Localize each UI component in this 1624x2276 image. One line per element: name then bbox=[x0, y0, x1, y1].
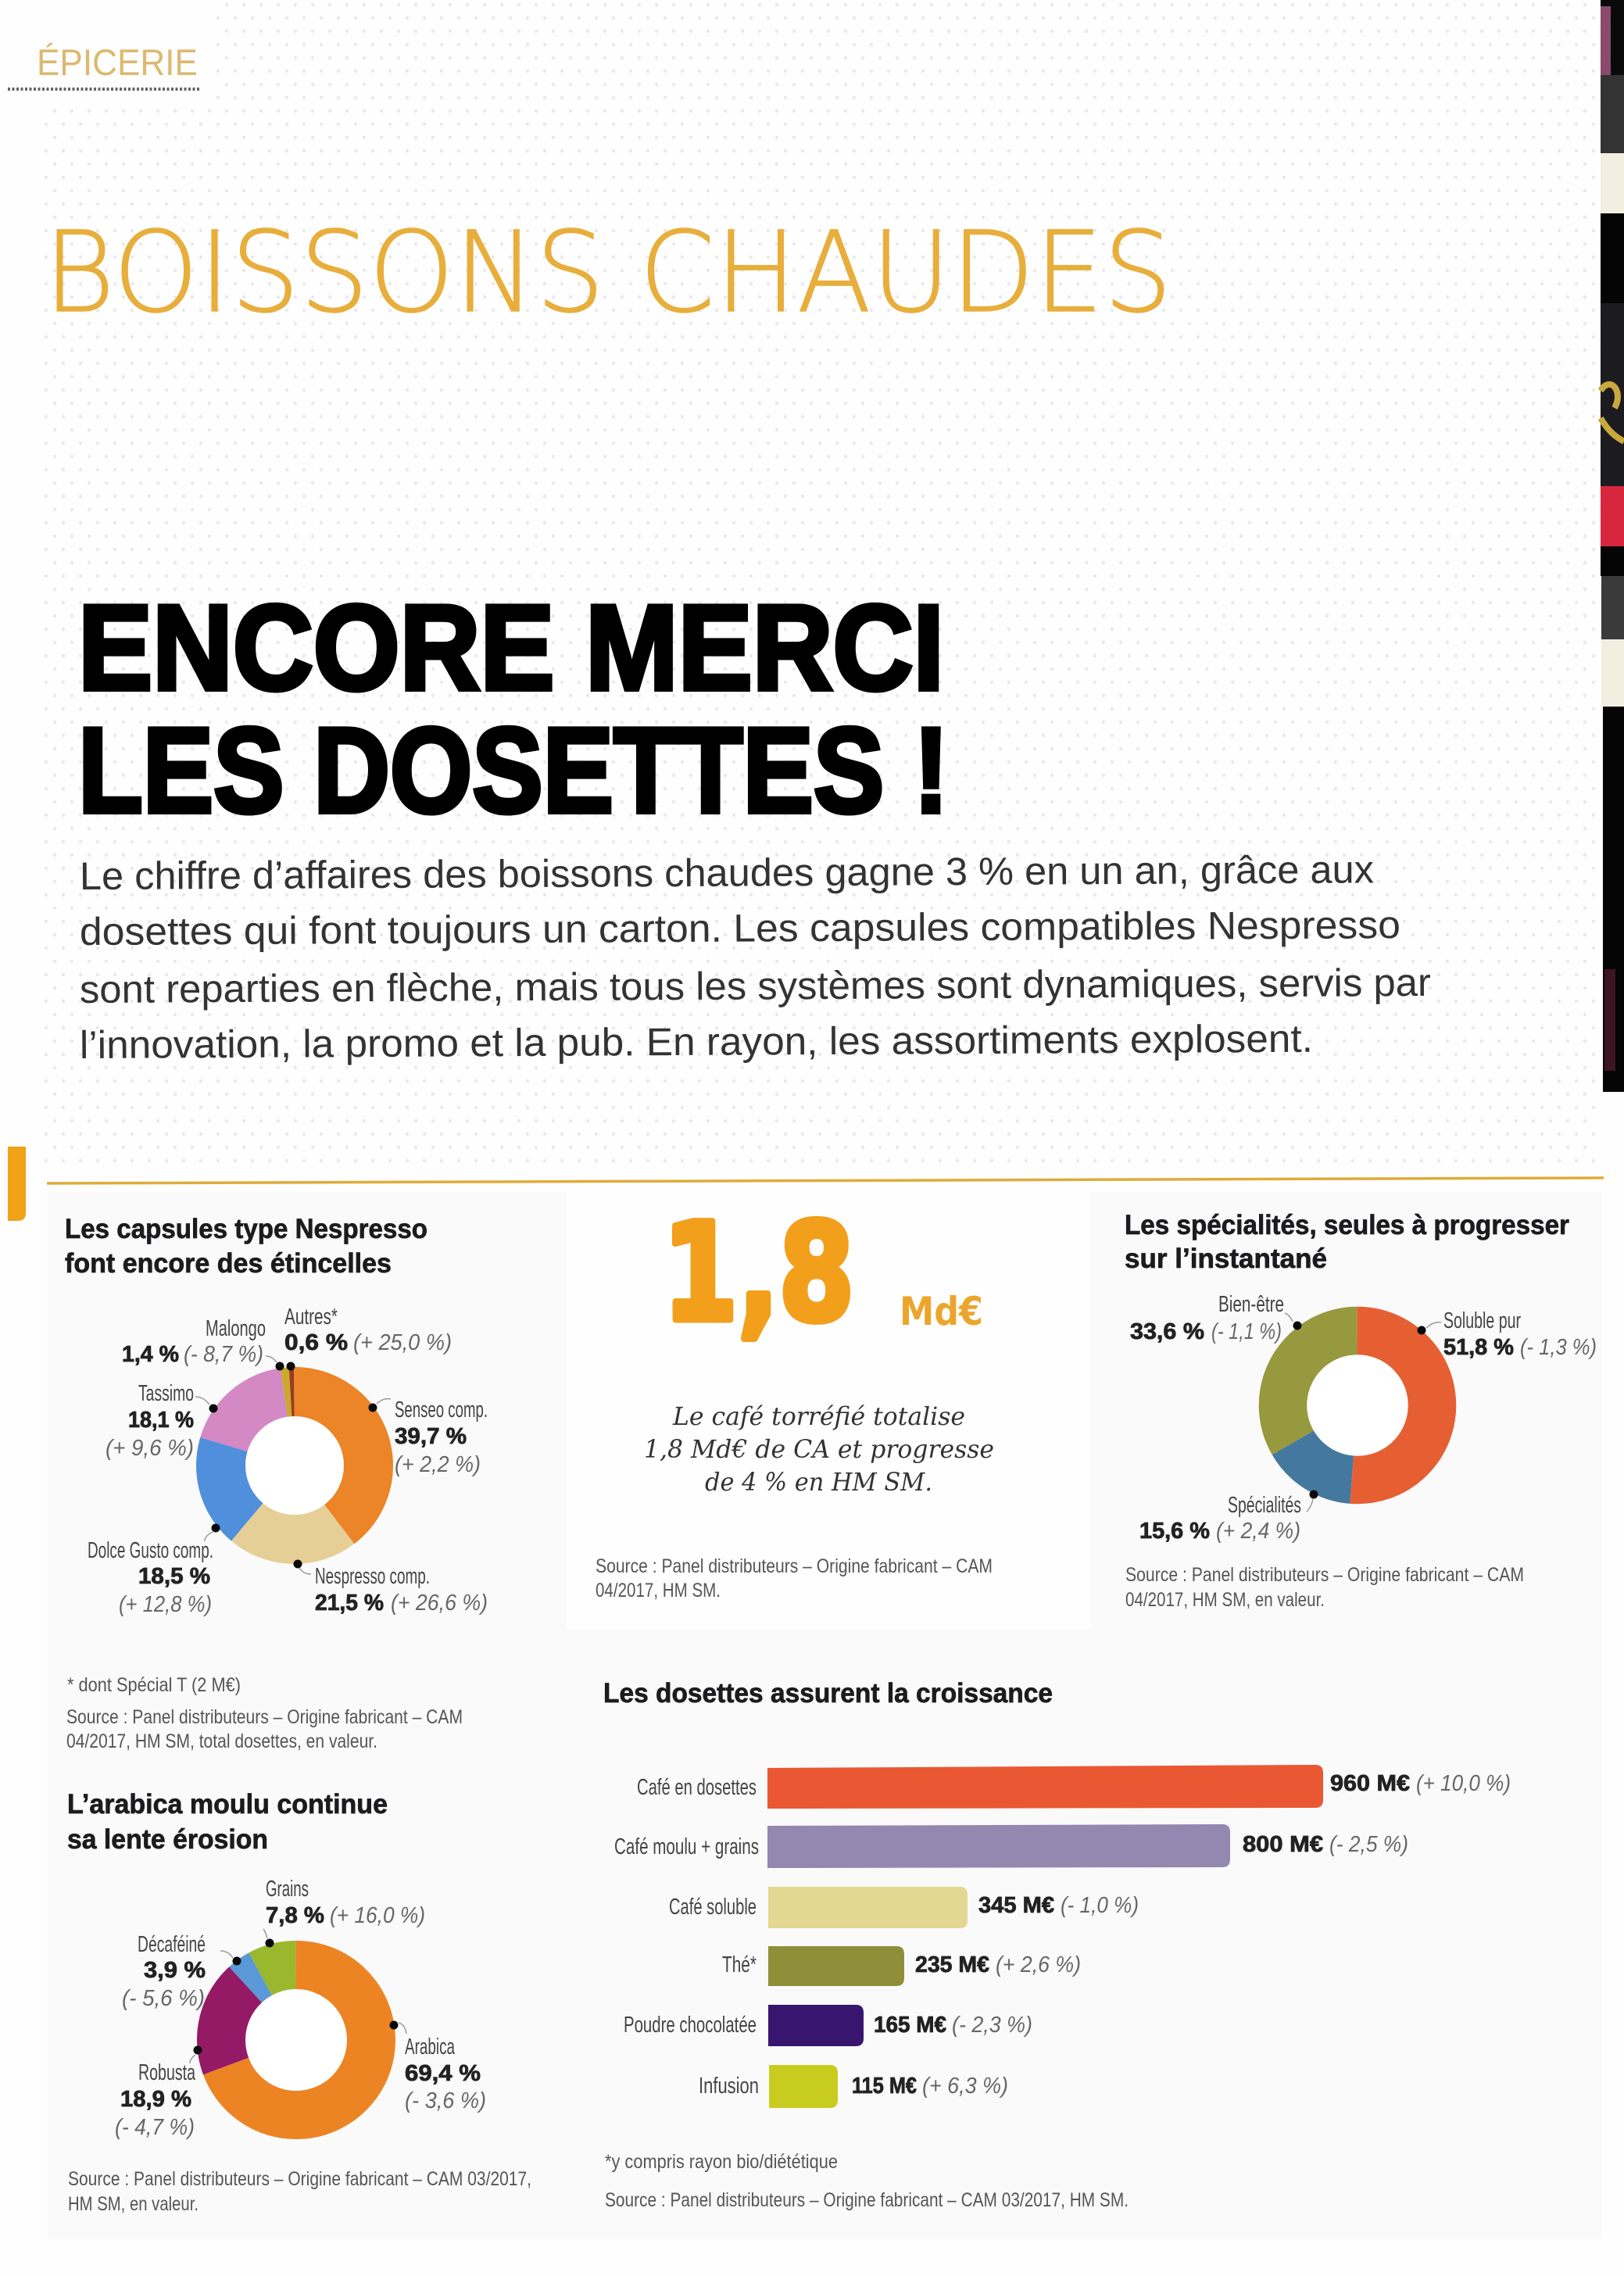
label: Grains: 7,8 % bbox=[266, 1903, 324, 1928]
source: café torréfié bbox=[596, 1555, 993, 1601]
heading: arabica: sa lente érosion bbox=[67, 1824, 268, 1855]
label: Robusta: Robusta bbox=[138, 2060, 196, 2085]
title: Encore merci les dosettes: ENCORE MERCI bbox=[78, 580, 944, 715]
heading: capsules bbox=[65, 1214, 427, 1279]
label: Grains: Grains bbox=[266, 1877, 309, 1902]
label: Décaféiné: 3,9 % bbox=[144, 1958, 206, 1983]
section label: Épicerie: ÉPICERIE bbox=[37, 41, 198, 83]
text block: introduction: l’innovation, la promo et la pub. En rayon, les assortiments explosent. bbox=[80, 1017, 1313, 1067]
label: Robusta: (- 4,7 %) bbox=[115, 2115, 195, 2140]
label: Senseo comp.: 39,7 % bbox=[395, 1424, 467, 1449]
bar: thé: 235 M€ bbox=[915, 1952, 989, 1977]
bar: poudre chocolatée bbox=[624, 2005, 1032, 2046]
label: Arabica bbox=[405, 2034, 486, 2113]
label: Décaféiné bbox=[122, 1932, 206, 2011]
label: Bien-être bbox=[1130, 1292, 1284, 1344]
label: Malongo: 1,4 % bbox=[122, 1342, 179, 1367]
label: Décaféiné: Décaféiné bbox=[138, 1932, 206, 1957]
label: Spécialités bbox=[1139, 1493, 1301, 1544]
footnote and source: dosettes: *y compris rayon bio/diététique bbox=[605, 2151, 838, 2173]
heading: spécialités bbox=[1125, 1210, 1569, 1274]
label: Soluble pur: (- 1,3 %) bbox=[1520, 1335, 1597, 1360]
label: Robusta bbox=[115, 2060, 196, 2140]
panel: 1,8 Md€ key figure bbox=[596, 1194, 994, 1601]
footnote and source: capsules: * dont Spécial T (2 M€) bbox=[67, 1674, 241, 1696]
bar: infusion: Infusion bbox=[699, 2074, 759, 2099]
text block: café torréfié bbox=[644, 1401, 994, 1497]
text block: introduction: Le chiffre d’affaires des boissons chaudes gagne 3 % en un an, grâce aux bbox=[80, 847, 1374, 898]
bar: poudre chocolatée: 165 M€ bbox=[874, 2013, 946, 2038]
label: Dolce Gusto comp.: 18,5 % bbox=[138, 1564, 210, 1589]
source: café torréfié: 04/2017, HM SM. bbox=[596, 1580, 721, 1601]
label: Arabica: Arabica bbox=[405, 2034, 456, 2059]
bar: café soluble bbox=[669, 1887, 1139, 1928]
text block: café torréfié: Le café torréfié totalise bbox=[672, 1401, 965, 1431]
bar: café en dosettes: (+ 10,0 %) bbox=[1416, 1771, 1511, 1796]
bar: café soluble: Café soluble bbox=[669, 1895, 757, 1920]
label: Autres: (+ 25,0 %) bbox=[353, 1330, 452, 1355]
source: café torréfié: Source : Panel distributeurs – Origine fabricant – CAM bbox=[596, 1555, 993, 1577]
bar: thé bbox=[722, 1946, 1081, 1986]
source: instantané bbox=[1125, 1564, 1524, 1611]
panel: capsules type Nespresso bbox=[65, 1214, 488, 1752]
label: Grains bbox=[266, 1877, 425, 1928]
bar: café soluble: 345 M€ bbox=[978, 1893, 1054, 1918]
figure: 1,8 Md€: 1,8 bbox=[663, 1194, 854, 1351]
icon: orange section tab bbox=[8, 1147, 26, 1221]
panel: right page edge photo strip bbox=[1601, 0, 1624, 1092]
label: Décaféiné: (- 5,6 %) bbox=[122, 1986, 205, 2011]
chart markers: instantané bbox=[1285, 1313, 1441, 1512]
label: Tassimo: (+ 9,6 %) bbox=[106, 1436, 194, 1461]
label: Soluble pur bbox=[1443, 1308, 1597, 1360]
label: Nespresso comp.: (+ 26,6 %) bbox=[391, 1591, 488, 1616]
heading: capsules: Les capsules type Nespresso bbox=[65, 1214, 427, 1244]
label: Bien-être: 33,6 % bbox=[1130, 1319, 1204, 1344]
heading: dosettes: Les dosettes assurent la croissance bbox=[603, 1678, 1053, 1709]
bar: café moulu + grains: 800 M€ bbox=[1243, 1832, 1323, 1857]
label: Bien-être: (- 1,1 %) bbox=[1211, 1319, 1282, 1344]
text block: introduction: dosettes qui font toujours un carton. Les capsules compatibles Nespresso bbox=[80, 903, 1400, 954]
label: Senseo comp.: Senseo comp. bbox=[395, 1397, 488, 1422]
panel: spécialités instantané bbox=[1125, 1210, 1597, 1611]
label: Spécialités: Spécialités bbox=[1228, 1493, 1301, 1518]
bar: café en dosettes: 960 M€ bbox=[1330, 1771, 1410, 1796]
label: Autres: 0,6 % bbox=[284, 1330, 348, 1355]
label: Soluble pur: 51,8 % bbox=[1443, 1335, 1514, 1360]
footnote and source: dosettes: Source : Panel distributeurs – Origine fabricant – CAM 03/2017, HM SM. bbox=[605, 2189, 1129, 2211]
bar: thé: Thé* bbox=[722, 1952, 757, 1977]
chart markers: capsules bbox=[195, 1356, 391, 1574]
bar: café en dosettes bbox=[637, 1765, 1511, 1809]
footnote and source: capsules: Source : Panel distributeurs – Origine fabricant – CAM bbox=[66, 1706, 463, 1728]
label: Bien-être: Bien-être bbox=[1218, 1292, 1284, 1317]
heading: Boissons chaudes: BOISSONS CHAUDES bbox=[44, 207, 1172, 338]
bar: infusion: 115 M€ bbox=[852, 2074, 917, 2099]
label: Senseo comp.: (+ 2,2 %) bbox=[395, 1452, 481, 1477]
source: café moulu: HM SM, en valeur. bbox=[68, 2193, 199, 2215]
source: instantané: 04/2017, HM SM, en valeur. bbox=[1125, 1589, 1325, 1611]
figure: 1,8 Md€: Md€ bbox=[900, 1289, 983, 1334]
donut chart: instantané bbox=[1283, 1330, 1432, 1480]
donut chart: capsules bbox=[220, 1391, 369, 1540]
label: Spécialités: (+ 2,4 %) bbox=[1216, 1519, 1300, 1544]
source: café moulu bbox=[68, 2168, 531, 2215]
label: Grains: (+ 16,0 %) bbox=[330, 1903, 425, 1928]
bar: café moulu + grains: Café moulu + grains bbox=[614, 1834, 759, 1859]
heading: spécialités: sur l’instantané bbox=[1125, 1244, 1327, 1274]
bar: thé: (+ 2,6 %) bbox=[996, 1952, 1081, 1977]
label: Senseo comp. bbox=[395, 1397, 488, 1477]
label: Autres bbox=[284, 1304, 452, 1355]
heading: capsules: font encore des étincelles bbox=[65, 1248, 392, 1279]
chart markers: café moulu bbox=[190, 1929, 406, 2063]
label: Malongo: (- 8,7 %) bbox=[184, 1342, 263, 1367]
label: Nespresso comp. bbox=[315, 1564, 488, 1616]
bar: café en dosettes: Café en dosettes bbox=[637, 1775, 757, 1800]
heading: arabica: L’arabica moulu continue bbox=[67, 1789, 388, 1820]
label: Dolce Gusto comp.: Dolce Gusto comp. bbox=[88, 1538, 213, 1563]
label: Nespresso comp.: 21,5 % bbox=[315, 1591, 384, 1616]
bar: poudre chocolatée: (- 2,3 %) bbox=[952, 2013, 1032, 2038]
text block: introduction bbox=[80, 847, 1431, 1067]
label: Malongo bbox=[122, 1316, 266, 1367]
text block: café torréfié: 1,8 Md€ de CA et progresse bbox=[644, 1434, 994, 1464]
label: Tassimo bbox=[106, 1381, 194, 1461]
label: Arabica: (- 3,6 %) bbox=[405, 2088, 486, 2113]
heading: arabica bbox=[67, 1789, 388, 1855]
text block: café torréfié: de 4 % en HM SM. bbox=[705, 1467, 932, 1497]
panel: arabica moulu bbox=[67, 1789, 531, 2215]
bar: poudre chocolatée: Poudre chocolatée bbox=[624, 2013, 757, 2038]
label: Arabica: 69,4 % bbox=[405, 2061, 481, 2086]
text block: introduction: sont reparties en flèche, mais tous les systèmes sont dynamiques, servis par bbox=[80, 961, 1431, 1011]
bar: infusion: (+ 6,3 %) bbox=[922, 2074, 1008, 2099]
label: Dolce Gusto comp. bbox=[88, 1538, 213, 1617]
label: Soluble pur: Soluble pur bbox=[1443, 1308, 1521, 1333]
heading: spécialités: Les spécialités, seules à progresser bbox=[1125, 1210, 1569, 1240]
label: Malongo: Malongo bbox=[206, 1316, 266, 1341]
source: café moulu: Source : Panel distributeurs – Origine fabricant – CAM 03/2017, bbox=[68, 2168, 531, 2190]
label: Nespresso comp.: Nespresso comp. bbox=[315, 1564, 430, 1589]
donut chart: café moulu bbox=[221, 1965, 371, 2115]
title: Encore merci les dosettes: LES DOSETTES ! bbox=[78, 703, 949, 838]
bar: café moulu + grains: (- 2,5 %) bbox=[1329, 1832, 1408, 1857]
footnote and source: dosettes bbox=[605, 2151, 1129, 2211]
panel: dosettes bar chart bbox=[603, 1678, 1511, 2211]
title: Encore merci les dosettes bbox=[78, 580, 949, 838]
footnote and source: capsules bbox=[66, 1674, 463, 1752]
label: Tassimo: Tassimo bbox=[138, 1381, 194, 1406]
label: Spécialités: 15,6 % bbox=[1139, 1519, 1210, 1544]
label: Tassimo: 18,1 % bbox=[128, 1408, 194, 1433]
footnote and source: capsules: 04/2017, HM SM, total dosettes, en valeur. bbox=[66, 1730, 377, 1752]
label: Robusta: 18,9 % bbox=[120, 2087, 191, 2112]
source: instantané: Source : Panel distributeurs – Origine fabricant – CAM bbox=[1125, 1564, 1524, 1586]
bar: café soluble: (- 1,0 %) bbox=[1061, 1893, 1139, 1918]
bar: infusion bbox=[699, 2065, 1008, 2108]
label: Autres: Autres* bbox=[284, 1304, 338, 1329]
bar: café moulu + grains bbox=[614, 1824, 1408, 1868]
label: Dolce Gusto comp.: (+ 12,8 %) bbox=[119, 1592, 212, 1617]
